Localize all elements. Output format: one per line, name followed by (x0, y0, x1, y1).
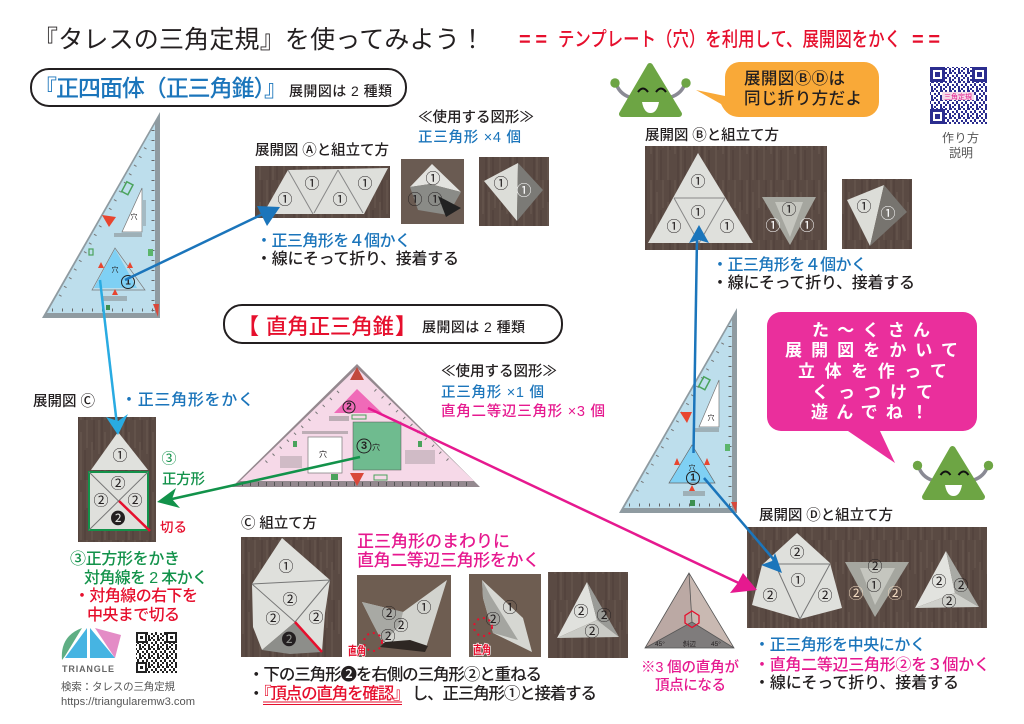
arrow: light blue to net C (100, 280, 128, 435)
ruler: isosceles (232, 364, 480, 487)
bubble: orange (696, 62, 879, 117)
photo: assembly C2: ② (380, 628, 396, 646)
text: around triangle (357, 532, 540, 570)
photo: folded B: ① (856, 198, 872, 216)
photo: net D: ② (887, 586, 903, 602)
subtitle: template: = = (519, 29, 549, 51)
text: net D steps: ・直角二等辺三角形②を３個かく (754, 656, 990, 674)
ruler: right triangle right: 1 (690, 472, 696, 484)
text: net A steps: ・正三角形を４個かく (256, 232, 411, 250)
label: net D: 展開図 Ⓓと組立て方 (759, 507, 893, 524)
bubble: pink (767, 312, 977, 463)
label: shapes used right-angle: 直角二等辺三角形 ×3 個 (441, 402, 605, 420)
ruler: right triangle right (619, 308, 737, 513)
text: net D steps: ・正三角形を中央にかく (754, 636, 926, 654)
text: net C steps: ③正方形をかき (70, 550, 180, 568)
photo: net D: ① (866, 578, 882, 594)
diagram: three right angles: 45° (655, 640, 665, 648)
arrow: blue to net D (704, 478, 782, 573)
photo: net B with fold: ① (781, 202, 797, 218)
photo: folded A top: ① (516, 182, 532, 200)
heading pill: right-angle pyramid: 展開図は 2 種類 (422, 319, 525, 335)
text: net A steps (256, 232, 459, 268)
photo: assembly C1: ② (308, 610, 324, 626)
photo: net B with fold: ① (690, 174, 706, 190)
photo: net B with fold: ① (765, 218, 781, 234)
text: around triangle: 正三角形のまわりに (357, 532, 510, 551)
photo: assembly C1: ② (282, 592, 298, 608)
bubble: pink: 展開図をかいて (785, 341, 958, 360)
ruler: right triangle left: 穴 (112, 266, 118, 274)
arrow: magenta to net D (368, 408, 757, 593)
photo: folded A top (479, 157, 549, 226)
heading pill: right-angle pyramid: 【 (237, 314, 259, 339)
photo: assembly C1 (241, 537, 342, 657)
photo: net C: ② (127, 492, 143, 510)
ruler: isosceles: 2 (346, 402, 352, 412)
photo: net A: ① (277, 192, 293, 208)
photo: net D: ② (941, 594, 957, 610)
photo: folded A side: ① (407, 192, 423, 208)
arrow: blue up to net B (689, 225, 709, 453)
ruler: isosceles: 穴 (319, 450, 327, 459)
photo: net D: ② (762, 588, 778, 604)
label: net A: 展開図 Ⓐと組立て方 (255, 142, 389, 159)
heading pill: regular tetrahedron: 展開図は 2 種類 (289, 83, 392, 99)
QR caption (942, 130, 979, 160)
photo: net D: ② (931, 574, 947, 590)
subtitle: template: テンプレート（穴）を利用して、展開図をかく (558, 28, 901, 51)
label: net B: 展開図 Ⓑと組立て方 (645, 127, 779, 144)
photo: net C: ① (112, 448, 128, 464)
text: net B steps: ・正三角形を４個かく (712, 256, 867, 274)
photo: net A: ① (304, 176, 320, 192)
text: net B steps: ・線にそって折り、接着する (712, 274, 915, 292)
text: net B steps (712, 256, 915, 292)
photo: net D (747, 527, 987, 628)
QR caption: 作り方 (942, 130, 979, 145)
heading pill: regular tetrahedron: 『正四面体（正三角錐）』 (34, 75, 287, 101)
bubble: pink: た～くさん (812, 321, 930, 340)
photo: assembly C2: ② (381, 606, 397, 622)
ruler: right triangle left (42, 112, 160, 318)
photo: folded A side: ① (425, 170, 441, 188)
photo: assembly C2: ① (416, 600, 432, 616)
photo: net B with fold: ① (666, 218, 682, 236)
heading pill: regular tetrahedron (31, 69, 406, 106)
photo: folded A side: ① (427, 192, 443, 208)
photo: net D: ② (848, 586, 864, 602)
photo: assembly C3: 直角 (473, 642, 491, 657)
photo: folded B (842, 179, 912, 249)
photo: assembly C4: ② (573, 604, 589, 620)
logo: TRIANGLE (62, 628, 121, 674)
ruler: right triangle left: 1 (125, 276, 131, 288)
photo: folded A top: ① (493, 176, 509, 192)
photo: net C (78, 417, 156, 542)
text: around triangle: 直角二等辺三角形をかく (357, 551, 540, 570)
photo: assembly C3 (469, 574, 541, 657)
text: net C triangle: ・正三角形をかく (121, 391, 254, 409)
photo: assembly C3: ② (485, 612, 501, 628)
label: square: 正方形 (162, 471, 206, 488)
photo: net A: ① (332, 192, 348, 208)
note: right angles (641, 658, 740, 694)
bubble: pink: くっつけて (812, 383, 933, 402)
text: search info: 検索：タレスの三角定規 (61, 680, 176, 693)
photo: folded B: ① (880, 206, 896, 222)
text: net A steps: ・線にそって折り、接着する (256, 250, 459, 268)
ruler: right triangle right: 穴 (708, 414, 714, 422)
heading pill: right-angle pyramid: 直角正三角錐 (266, 315, 394, 339)
diagram: three right angles: 斜辺 (683, 639, 696, 648)
label: shapes used A (418, 109, 534, 146)
photo: assembly C2: 直角 (348, 643, 366, 658)
photo: assembly C2: ② (393, 618, 409, 634)
note: right angles: ※3 個の直角が (641, 658, 740, 676)
subtitle: template: = = (912, 29, 942, 51)
bubble: orange: 同じ折り方だよ (744, 89, 862, 108)
QR caption: 説明 (949, 145, 973, 160)
photo: net D: ② (817, 588, 833, 604)
text: search info (61, 680, 195, 708)
photo: net D: ① (790, 572, 806, 590)
text: net D steps: ・線にそって折り、接着する (754, 674, 959, 692)
photo: net C: ❷ (110, 510, 126, 528)
QR: site (136, 632, 177, 673)
heading pill: right-angle pyramid (224, 305, 562, 343)
text: net C steps: 対角線を 2 本かく (84, 569, 208, 587)
photo: net C: ② (93, 492, 109, 510)
photo: net A (255, 166, 390, 218)
label: net C: 展開図 Ⓒ (33, 393, 96, 410)
photo: net B with fold (645, 146, 827, 250)
note: right angles: 頂点になる (655, 677, 726, 694)
diagram: three right angles (645, 573, 734, 648)
photo: net B with fold: ① (799, 218, 815, 234)
arrow: green to net C (157, 457, 360, 508)
photo: net D: ② (953, 578, 969, 594)
photo: net B with fold: ① (719, 218, 735, 236)
photo: assembly C1: ① (278, 558, 294, 576)
label: shapes used right-angle: ≪使用する図形≫ (441, 363, 557, 380)
ruler: isosceles: 穴 (372, 443, 380, 452)
text: net D steps (754, 636, 990, 692)
text: search info: https://triangularemw3.com (61, 696, 195, 708)
mascot bottom (913, 449, 993, 497)
text: net C steps: 中央まで切る (87, 606, 180, 624)
heading pill: right-angle pyramid: 】 (395, 314, 417, 339)
label: shapes used right-angle: 正三角形 ×1 個 (441, 384, 544, 401)
diagram: three right angles: 45° (711, 640, 721, 648)
photo: assembly C4: ② (596, 608, 612, 624)
photo: assembly C4 (548, 572, 628, 658)
photo: assembly C1: ❷ (281, 632, 297, 648)
photo: assembly C4: ② (584, 624, 600, 640)
logo: TRIANGLE: TRIANGLE (62, 664, 114, 674)
QR: how to make: 三角定規 (944, 92, 972, 101)
photo: folded A side (401, 159, 464, 224)
text: net C steps: ・対角線の右下を (74, 587, 198, 605)
text: assembly steps: ・『頂点の直角を確認』 し、正三角形①と接着する (248, 684, 597, 703)
bubble: pink: 遊んでね！ (811, 402, 928, 422)
text: net C steps (70, 550, 208, 624)
photo: net D: ② (789, 544, 805, 562)
title: 『タレスの三角定規』を使ってみよう！ (33, 26, 485, 54)
photo: net D: ② (867, 558, 883, 576)
label: square (161, 450, 206, 488)
mascot top (610, 66, 691, 114)
bubble: orange: 展開図ⒷⒹは (744, 69, 845, 88)
photo: assembly C1: ② (265, 610, 281, 628)
photo: assembly C3: ① (502, 600, 518, 616)
label: assembly C: Ⓒ 組立て方 (241, 515, 317, 532)
ruler: right triangle left: 穴 (130, 213, 138, 221)
label: square: ③ (161, 450, 177, 468)
photo: net C: ② (110, 476, 126, 492)
photo: net B with fold: ① (690, 204, 706, 222)
text: assembly steps (248, 665, 597, 704)
label: shapes used right-angle (441, 363, 605, 420)
label: shapes used A: ≪使用する図形≫ (418, 109, 534, 126)
bubble: pink: 立体を作って (798, 362, 947, 381)
text: assembly steps: ・下の三角形❷を右側の三角形②と重ねる (248, 665, 542, 684)
label: shapes used A: 正三角形 ×4 個 (418, 129, 521, 146)
ruler: isosceles: 3 (361, 440, 367, 452)
ruler: right triangle right: 穴 (688, 464, 696, 472)
label: cut: 切る (160, 520, 187, 535)
QR: how to make (930, 67, 987, 124)
photo: net A: ① (357, 176, 373, 192)
arrow: blue to net A (125, 206, 280, 280)
photo: assembly C2 (348, 575, 451, 658)
